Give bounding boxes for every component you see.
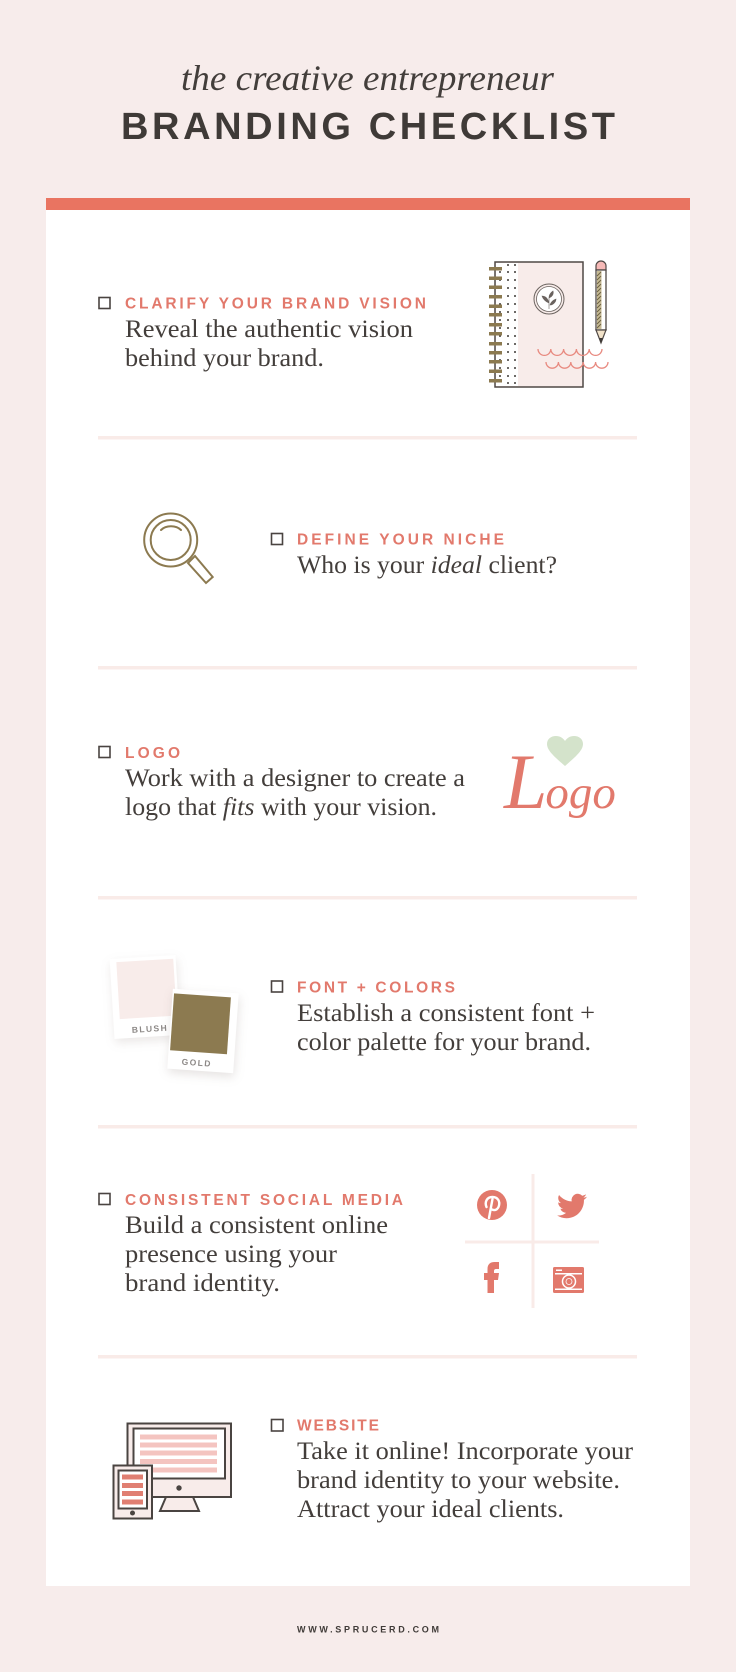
panel: checklist card — [46, 198, 690, 1586]
footer url: WWW.SPRUCERD.COM — [297, 1624, 439, 1634]
icon: gold swatch — [167, 989, 239, 1073]
social icon grid — [465, 1174, 599, 1308]
item: font + colors: Establish a consistent font + — [297, 1000, 595, 1027]
item: logo: logo that fits with your vision. — [125, 794, 437, 821]
icon: gold swatch: GOLD — [181, 1057, 212, 1069]
item: website: Take it online! Incorporate your — [297, 1438, 634, 1465]
item: clarify your brand vision: behind your brand. — [125, 345, 324, 372]
icon: desktop and tablet — [114, 1424, 231, 1518]
item: consistent social media: presence using your — [125, 1241, 338, 1268]
item: consistent social media: Build a consistent online — [125, 1212, 388, 1239]
item: clarify your brand vision: CLARIFY YOUR BRAND VISION — [125, 296, 426, 312]
item: clarify your brand vision: Reveal the authentic vision — [125, 316, 414, 343]
item: clarify your brand vision — [99, 296, 426, 372]
item: website: brand identity to your website. — [297, 1467, 620, 1494]
icon: blush swatch — [110, 955, 180, 1039]
item: define your niche: DEFINE YOUR NICHE — [297, 532, 504, 548]
item: font + colors: color palette for your brand. — [297, 1029, 591, 1056]
item: consistent social media — [99, 1192, 403, 1297]
title: BRANDING CHECKLIST — [121, 106, 615, 148]
icon: pinterest — [477, 1190, 507, 1220]
icon: blush swatch: BLUSH — [132, 1023, 168, 1035]
item: font + colors: FONT + COLORS — [297, 980, 455, 996]
item: website: WEBSITE — [297, 1418, 379, 1434]
icon: heart — [547, 736, 583, 766]
title — [121, 58, 615, 148]
item: consistent social media: brand identity. — [125, 1270, 280, 1297]
item: logo: Work with a designer to create a — [125, 765, 465, 792]
item: website — [272, 1418, 634, 1523]
item: consistent social media: CONSISTENT SOCIAL MEDIA — [125, 1192, 403, 1209]
icon: magnifying glass — [144, 514, 213, 583]
item: logo: LOGO — [125, 745, 180, 762]
item: define your niche — [272, 532, 557, 579]
icon: notebook and pencil — [489, 261, 608, 387]
item: define your niche: Who is your ideal client? — [297, 552, 557, 579]
item: logo — [99, 745, 465, 821]
icon: camera — [553, 1267, 584, 1293]
title: the creative entrepreneur — [181, 58, 555, 98]
icon: facebook — [484, 1262, 499, 1293]
logo script word: Logo — [503, 738, 616, 825]
item: font + colors — [272, 980, 595, 1056]
item: website: Attract your ideal clients. — [297, 1496, 564, 1523]
icon: twitter — [557, 1194, 587, 1218]
